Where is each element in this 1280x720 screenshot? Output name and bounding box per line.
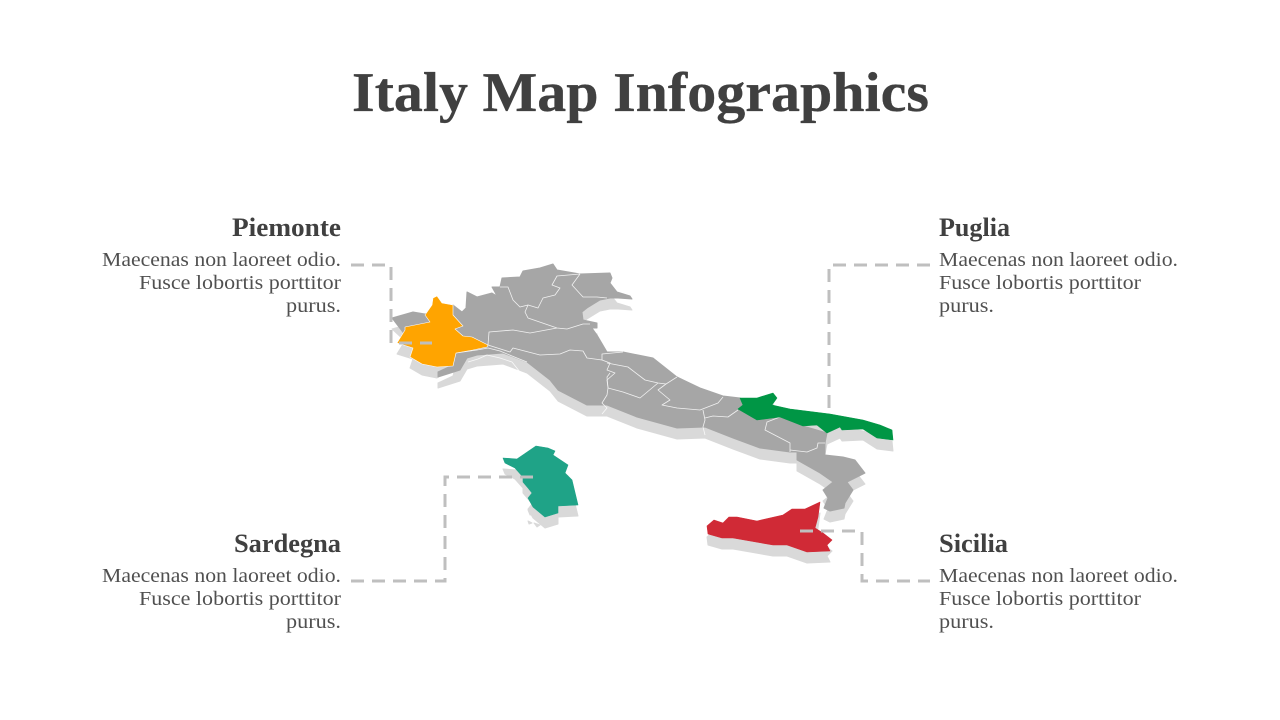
region borders xyxy=(456,274,825,452)
text block: Piemonte: Piemonte xyxy=(232,213,341,242)
connector: Puglia xyxy=(829,265,930,415)
region: Sardegna xyxy=(503,446,578,517)
map shadow xyxy=(392,275,893,563)
text block: Sardegna: Sardegna xyxy=(234,529,341,558)
region: Sicilia xyxy=(707,502,832,552)
connector: Sardegna xyxy=(351,477,533,581)
text block: Puglia: Maecenas non laoreet odio. xyxy=(939,249,1178,271)
region: Piemonte xyxy=(397,296,488,367)
text block: Piemonte: Maecenas non laoreet odio. xyxy=(102,249,341,271)
region: Puglia xyxy=(738,393,893,440)
text block: Puglia: purus. xyxy=(939,295,994,317)
text block: Sicilia: Sicilia xyxy=(939,529,1008,558)
map of Italy xyxy=(392,264,893,563)
text block: Sicilia xyxy=(939,529,1178,633)
text block: Sicilia: Fusce lobortis porttitor xyxy=(939,588,1141,610)
text block: Sicilia: purus. xyxy=(939,611,994,633)
text block: Puglia xyxy=(939,213,1178,317)
connector: Sicilia xyxy=(800,531,930,581)
text block: Piemonte: Fusce lobortis porttitor xyxy=(139,272,341,294)
title: Italy Map Infographics xyxy=(352,62,929,124)
text block: Puglia: Fusce lobortis porttitor xyxy=(939,272,1141,294)
text block: Sardegna: Maecenas non laoreet odio. xyxy=(102,565,341,587)
text block: Sicilia: Maecenas non laoreet odio. xyxy=(939,565,1178,587)
connector: Piemonte xyxy=(351,265,432,343)
text block: Puglia: Puglia xyxy=(939,213,1010,242)
text block: Sardegna: Fusce lobortis porttitor xyxy=(139,588,341,610)
text block: Piemonte xyxy=(102,213,341,317)
text block: Sardegna xyxy=(102,529,341,633)
mainland regions xyxy=(392,264,865,511)
text block: Piemonte: purus. xyxy=(286,295,341,317)
text block: Sardegna: purus. xyxy=(286,611,341,633)
